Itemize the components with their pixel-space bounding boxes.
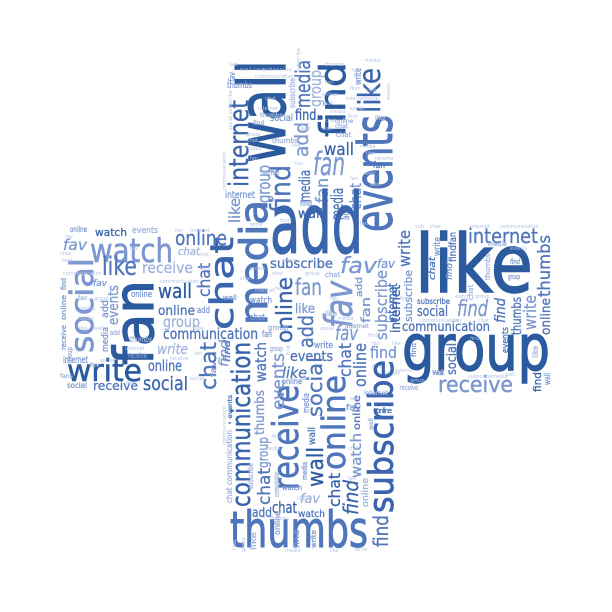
- left arm words: internet: [63, 355, 88, 366]
- top arm words: wall: [298, 207, 323, 222]
- bottom arm words: wall: [307, 427, 318, 445]
- left arm words: [60, 225, 258, 395]
- bottom arm words: watch: [349, 433, 365, 478]
- center words: like: [325, 310, 337, 318]
- right arm words: media: [488, 241, 507, 248]
- bottom arm words: online: [273, 511, 282, 535]
- word: write: write: [67, 354, 142, 389]
- right arm words: chat: [430, 224, 441, 230]
- top arm words: write: [366, 96, 379, 102]
- bottom arm words: internet: [364, 390, 388, 397]
- top arm words: fan: [313, 145, 345, 183]
- left arm words: like: [195, 326, 204, 332]
- left arm words: online: [175, 226, 227, 250]
- word: events: events: [345, 115, 405, 232]
- top arm words: online: [240, 67, 265, 73]
- right arm words: internet: [389, 285, 404, 333]
- bottom arm words: group: [256, 437, 272, 468]
- left arm words: find: [126, 381, 136, 387]
- top arm words: like: [375, 115, 386, 122]
- center words: online: [282, 377, 302, 386]
- word: internet: internet: [468, 224, 538, 248]
- word: subscribe (vertical): subscribe: [362, 360, 402, 513]
- center words: find: [286, 346, 292, 355]
- top arm words: thumbs: [260, 112, 283, 119]
- center words: fan: [262, 330, 272, 340]
- left arm words: wall: [62, 258, 72, 264]
- bottom arm words: media: [301, 462, 309, 480]
- top arm words: thumbs: [227, 81, 252, 91]
- left arm words: group: [94, 296, 109, 302]
- top arm words: fan: [295, 161, 303, 167]
- right arm words: internet: [470, 224, 490, 230]
- top arm words: chat: [366, 88, 377, 94]
- center words: fan: [359, 297, 373, 323]
- right arm words: receive: [400, 384, 418, 392]
- bottom arm words: fav: [346, 403, 361, 412]
- word: media: media: [232, 200, 276, 325]
- bottom arm words: watch: [298, 509, 325, 520]
- right arm words: find: [400, 296, 410, 302]
- left arm words: fav: [209, 361, 218, 377]
- center words: fan: [372, 341, 380, 347]
- left arm words: internet: [190, 228, 210, 234]
- top arm words: media: [365, 58, 381, 64]
- left arm words: write: [157, 342, 188, 358]
- bottom arm words: chat: [325, 473, 344, 507]
- left arm words: thumbs: [130, 335, 152, 344]
- top arm words: media: [291, 60, 315, 108]
- right arm words: find: [531, 372, 544, 392]
- bottom arm words: media: [302, 393, 312, 413]
- right arm words: social: [445, 343, 460, 375]
- word: online (vertical): online: [315, 375, 353, 470]
- bottom arm words: communication: [273, 472, 281, 497]
- center words: fan: [330, 296, 338, 302]
- right arm words: find: [493, 298, 509, 323]
- left arm words: fav: [63, 236, 88, 254]
- bottom arm words: chat: [272, 498, 297, 517]
- word: chat (large): chat: [203, 237, 241, 330]
- left arm words: chat: [60, 251, 71, 257]
- left arm words: like: [79, 326, 88, 332]
- left arm words: media: [78, 316, 94, 322]
- left arm words: fav: [130, 246, 138, 252]
- top arm words: social: [270, 113, 293, 124]
- word: receive (vertical): receive: [266, 385, 307, 490]
- bottom arm words: wall: [304, 447, 329, 487]
- top arm words: chat: [335, 123, 349, 130]
- right arm words: find: [510, 258, 520, 266]
- left arm words: communication: [63, 271, 102, 277]
- center words: find: [370, 343, 397, 362]
- center words: chat: [325, 271, 341, 279]
- word: like (large): like: [415, 218, 533, 311]
- top arm words: chat: [336, 131, 352, 139]
- top arm words: chat: [265, 96, 276, 102]
- left arm words: receive: [170, 356, 188, 362]
- top arm words: chat: [346, 183, 365, 210]
- left arm words: social: [143, 373, 188, 395]
- right arm words: group: [475, 294, 490, 300]
- bottom arm words: chat communication: [225, 430, 234, 503]
- top arm words: fan: [350, 176, 358, 182]
- right arm words: like: [392, 341, 401, 347]
- top arm words: media: [330, 109, 346, 115]
- bottom arm words: add: [252, 506, 272, 521]
- center words: chat: [272, 271, 283, 277]
- right arm words: subscribe: [468, 374, 492, 380]
- left arm words: chat: [178, 245, 201, 258]
- top arm words: internet: [225, 190, 255, 201]
- top arm words: fan: [313, 178, 333, 203]
- center words: subscribe: [270, 257, 333, 272]
- bottom arm words: chat: [348, 446, 359, 452]
- left arm words: fans: [60, 373, 73, 380]
- word: online: online: [273, 277, 298, 343]
- right arm words: social: [417, 304, 448, 320]
- center words: chat: [240, 276, 251, 282]
- top arm words: find: [264, 165, 297, 213]
- left arm words: find: [60, 278, 68, 290]
- top arm words: find: [350, 86, 360, 92]
- center words: chat: [250, 313, 265, 323]
- right arm words: thumbs: [484, 253, 492, 280]
- bottom arm words: [222, 342, 402, 559]
- right arm words: find: [410, 343, 418, 357]
- bottom arm words: like: [297, 496, 306, 502]
- right arm words: events: [501, 327, 511, 353]
- center words: group: [270, 345, 283, 353]
- bottom arm words: like: [250, 532, 258, 550]
- top arm words: chat: [325, 118, 336, 124]
- left arm words: fav: [78, 295, 88, 302]
- bottom arm words: communication: [222, 406, 228, 445]
- top arm words: chat: [247, 138, 258, 144]
- top arm words: find: [300, 199, 312, 208]
- bottom arm words: thumbs: [270, 516, 289, 522]
- top arm words: find: [253, 120, 265, 127]
- bottom arm words: • events: [227, 395, 234, 425]
- right arm words: [389, 218, 555, 398]
- top arm words: resume: [375, 156, 394, 162]
- top arm words: add: [370, 182, 379, 188]
- top arm words: fan: [360, 221, 368, 227]
- top arm words: wall: [322, 126, 332, 132]
- top arm words: media: [328, 188, 348, 220]
- right arm words: subscribe: [402, 270, 415, 322]
- left arm words: online: [158, 304, 195, 319]
- top arm words: communication: [255, 74, 294, 80]
- center words: group: [305, 271, 320, 277]
- word: receive: receive: [438, 373, 513, 398]
- center words: online: [351, 343, 371, 387]
- top arm words: online: [322, 92, 337, 98]
- center words: wall: [300, 376, 310, 382]
- top arm words: social: [350, 106, 364, 112]
- bottom arm words: write: [310, 530, 318, 548]
- top arm words: group: [246, 132, 261, 138]
- right arm words: media: [492, 374, 508, 380]
- word: like: like: [353, 68, 388, 113]
- right arm words: communication: [420, 318, 459, 324]
- left arm words: online: [60, 295, 68, 320]
- bottom arm words: like: [330, 548, 339, 554]
- top arm words: social subscribe: [228, 90, 234, 130]
- bottom arm words: subscribe: [247, 463, 255, 489]
- word: fan: fan: [103, 280, 166, 365]
- word: watch: watch: [90, 231, 173, 270]
- center words: internet: [345, 323, 369, 330]
- left arm words: receive: [60, 325, 68, 350]
- center words: fan: [295, 275, 322, 301]
- left arm words: events: [132, 226, 158, 236]
- left arm words: add: [100, 300, 111, 318]
- left arm words: find: [200, 266, 210, 272]
- right arm words: wall: [543, 373, 552, 385]
- center words: subscribe: [372, 270, 391, 340]
- left arm words: fav: [93, 279, 108, 289]
- center words: find: [223, 340, 233, 362]
- top arm words: events: [386, 83, 392, 100]
- top arm words: thumbs: [325, 62, 344, 68]
- center words: like: [282, 364, 307, 382]
- left arm words: social: [67, 381, 87, 390]
- right arm words: thumbs: [510, 297, 525, 335]
- top arm words: fan: [373, 161, 385, 171]
- center words: internet: [386, 283, 401, 323]
- right arm words: watch: [455, 294, 470, 300]
- top arm words: find: [348, 114, 358, 120]
- left arm words: like: [102, 252, 137, 282]
- top arm words: find.: [295, 106, 320, 124]
- left arm words: media: [101, 327, 111, 352]
- left arm words: online: [148, 357, 182, 375]
- top arm words: add: [324, 101, 333, 107]
- center words: online: [282, 258, 297, 264]
- bottom arm words: write: [355, 547, 368, 553]
- bottom arm words: media: [285, 548, 301, 554]
- bottom arm words: find: [369, 515, 393, 547]
- right arm words: online: [539, 298, 554, 335]
- left arm words: receive: [142, 259, 193, 277]
- top arm words: fav: [352, 68, 360, 74]
- right arm words: events: [395, 368, 412, 374]
- top arm words: thumbs: [272, 137, 299, 145]
- top arm words: like: [292, 143, 301, 149]
- right arm words: write: [433, 237, 443, 256]
- top arm words: internet: [258, 106, 278, 112]
- word: find: find: [313, 62, 354, 137]
- word: social (vertical): social: [63, 258, 101, 353]
- center words: internet: [255, 288, 275, 294]
- left arm words: fav: [90, 362, 100, 369]
- right arm words: chat: [467, 284, 475, 300]
- top arm words: group: [306, 70, 325, 107]
- top arm words: wall: [324, 140, 354, 160]
- center words: events: [290, 349, 333, 365]
- right arm words: find: [470, 336, 480, 342]
- top arm words: communication: [222, 151, 228, 190]
- top arm words: wall: [365, 171, 375, 177]
- left arm words: chat: [198, 252, 209, 258]
- left arm words: wall: [158, 279, 192, 303]
- right arm words: wall: [505, 372, 515, 378]
- center words: like: [295, 302, 315, 317]
- bottom arm words: find: [339, 480, 363, 515]
- left arm words: internet: [125, 346, 145, 352]
- right arm words: find: [457, 297, 489, 322]
- bottom arm words: events: [269, 353, 289, 410]
- top arm words: add: [341, 206, 352, 220]
- bottom arm words: find: [272, 434, 282, 440]
- word: communication: communication: [163, 325, 258, 343]
- right arm words: like: [531, 346, 540, 358]
- left arm words: online: [70, 225, 87, 234]
- top arm words: last: [229, 62, 238, 68]
- word: communication (vertical): communication: [227, 342, 257, 507]
- bottom arm words: online: [361, 478, 371, 507]
- top arm words: online: [335, 118, 354, 125]
- top arm words: write: [250, 222, 263, 228]
- left arm words: find: [217, 340, 231, 367]
- bottom arm words: chat: [232, 539, 238, 550]
- right arm words: sub: [415, 224, 424, 230]
- left arm words: wall: [94, 326, 104, 332]
- center words: fav: [377, 257, 396, 271]
- left arm words: events: [106, 285, 122, 325]
- bottom arm words: add: [350, 396, 359, 402]
- center words: online: [250, 266, 265, 272]
- top arm words: like: [226, 198, 244, 223]
- center words: add: [294, 315, 318, 348]
- top arm words: find: [280, 218, 290, 224]
- left arm words: fan: [194, 351, 202, 357]
- right arm words: find: [448, 245, 459, 262]
- right arm words: chat: [428, 256, 438, 280]
- left arm words: online: [80, 306, 95, 312]
- top arm words: fan: [325, 80, 333, 86]
- word: add: add: [270, 175, 363, 273]
- left arm words: social: [100, 358, 114, 364]
- bottom arm words: chat: [255, 468, 275, 505]
- bottom arm words: social: [303, 357, 327, 417]
- top arm words: media: [360, 144, 376, 150]
- top arm words: media: [246, 146, 262, 152]
- top arm words: fan: [250, 156, 258, 162]
- right arm words: communication: [500, 224, 539, 230]
- center words: find: [372, 364, 382, 370]
- bottom arm words: find: [293, 530, 301, 548]
- top arm words: [222, 48, 405, 232]
- right arm words: events: [510, 246, 527, 252]
- center words: watch: [250, 296, 272, 306]
- bottom arm words: fav: [300, 492, 320, 507]
- word: communication (right): communication: [402, 320, 490, 335]
- right arm words: group: [508, 273, 520, 281]
- center words: fav: [340, 254, 378, 279]
- left arm words: chat: [197, 342, 222, 390]
- center words: watch: [252, 342, 270, 382]
- center words: fan: [275, 286, 283, 292]
- bottom arm words: media: [265, 446, 281, 452]
- bottom arm words: thumbs: [253, 390, 268, 435]
- left arm words: group: [163, 313, 200, 331]
- right arm words: find: [445, 262, 454, 280]
- top arm words: wall: [300, 126, 310, 132]
- word: internet: internet: [224, 100, 255, 187]
- right arm words: group: [410, 378, 425, 384]
- left arm words: add: [197, 306, 210, 316]
- center words: group: [268, 324, 289, 332]
- top arm words: group: [254, 165, 275, 203]
- top arm words: write: [262, 169, 280, 177]
- center words: fan: [302, 372, 308, 380]
- top arm words: add: [291, 122, 313, 157]
- center words: fav: [335, 321, 359, 345]
- center words: find: [368, 333, 378, 339]
- left arm words: watch: [95, 226, 127, 239]
- top arm words: subscribe: [262, 67, 292, 73]
- center words: [203, 175, 401, 387]
- left arm words: group: [66, 347, 74, 363]
- top arm words: subscribe: [288, 78, 297, 108]
- top arm words: internet: [346, 96, 366, 102]
- center words: social: [320, 326, 334, 332]
- word: thumbs: thumbs: [535, 235, 555, 297]
- left arm words: chat: [195, 263, 215, 297]
- right arm words: wall: [432, 368, 444, 377]
- right arm words: write: [395, 230, 414, 267]
- left arm words: fav: [65, 234, 73, 240]
- right arm words: chat: [478, 318, 489, 324]
- word: fav (large): fav: [317, 281, 361, 328]
- left arm words: receive: [128, 351, 147, 360]
- top arm words: fav: [228, 72, 238, 82]
- left arm words: fan: [175, 228, 183, 234]
- top arm words: like: [366, 151, 375, 157]
- word: wall: wall: [224, 60, 301, 163]
- right arm words: write: [521, 295, 541, 330]
- word: group: group: [402, 312, 550, 385]
- left arm words: add: [110, 329, 120, 337]
- center words: write: [314, 341, 333, 351]
- top arm words: subscribe: [296, 48, 302, 72]
- bottom arm words: wall: [368, 418, 375, 430]
- top arm words: write: [354, 68, 364, 85]
- right arm words: fan: [453, 318, 461, 324]
- center words: internet: [380, 371, 400, 377]
- left arm words: online: [131, 290, 152, 300]
- bottom arm words: online: [376, 407, 392, 415]
- bottom arm words: group: [241, 537, 247, 552]
- word: thumbs (large): thumbs: [230, 501, 368, 559]
- right arm words: fan: [448, 232, 459, 245]
- bottom arm words: watch: [282, 484, 302, 492]
- center words: chat: [336, 343, 356, 377]
- top arm words: media: [296, 170, 314, 202]
- center words: wall: [223, 294, 237, 302]
- left arm words: receive: [93, 379, 138, 393]
- center words: media: [338, 316, 354, 322]
- bottom arm words: online: [352, 395, 363, 430]
- right arm words: subscribe: [417, 297, 450, 306]
- left arm words: communication: [160, 279, 199, 285]
- left arm words: social: [190, 376, 204, 382]
- center words: add: [355, 277, 365, 297]
- bottom arm words: fan: [348, 476, 356, 482]
